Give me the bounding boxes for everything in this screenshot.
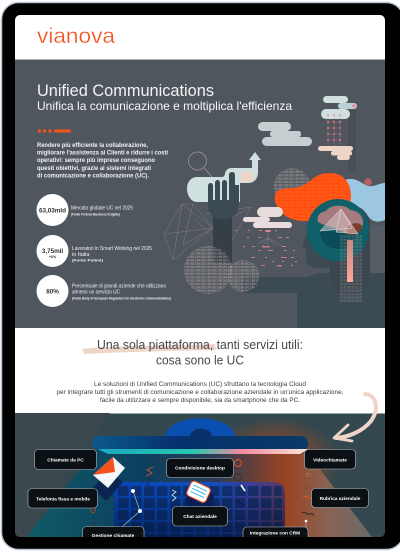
keyboard	[114, 482, 285, 537]
logo: vianova: vianova	[37, 25, 115, 48]
intro paragraph: migliorare l'assistenza ai Clienti e ridurre i costi	[37, 150, 168, 156]
intro paragraph	[37, 143, 168, 180]
stat: 3,75mil: in Italia	[72, 252, 90, 258]
stat: 80%: almeno un servizio UC	[72, 290, 120, 296]
subtitle: Unifica la comunicazione e moltiplica l'efficienza	[37, 99, 292, 113]
illustration: network lines	[164, 204, 251, 260]
stat: 3,75mil: (Fonte Polimi)	[72, 258, 103, 262]
stat: 63,03mld: 63,03mld	[39, 208, 66, 214]
stat: 80%: (Fonte Body of European Regulators for Electronic Communications)	[72, 296, 171, 300]
label: Integrazione con CRM	[243, 527, 308, 547]
title: Unified Communications	[37, 82, 214, 100]
stat: 80%: 80%	[46, 288, 59, 296]
illustration: hand with arrow	[187, 152, 261, 263]
label: Gestione chiamate: Gestione chiamate	[92, 533, 135, 539]
monitor light strip	[98, 449, 308, 454]
label: Chiamate da PC	[34, 450, 96, 470]
label: Chat aziendale: Chat aziendale	[183, 514, 217, 520]
label: Chiamate da PC: Chiamate da PC	[47, 458, 84, 464]
label: Chat aziendale	[172, 506, 228, 526]
intro paragraph: Rendere più efficiente la collaborazione,	[37, 143, 148, 149]
stat: 80%	[36, 275, 171, 307]
label: Integrazione con CRM: Integrazione con CRM	[250, 530, 300, 536]
label: Videochiamate	[304, 450, 356, 469]
label: Telefonia fissa e mobile: Telefonia fissa e mobile	[36, 496, 90, 502]
section heading: Una sola piattaforma, tanti servizi utili:	[97, 337, 303, 352]
stat: 3,75mil: 3,75mil	[42, 248, 63, 255]
section paragraph: Le soluzioni di Unified Communications (UC) sfruttano la tecnologia Cloud	[94, 381, 306, 388]
panel: intro section	[15, 328, 385, 414]
illustration: cloud with pink grid	[318, 96, 357, 160]
monitor dome	[165, 418, 235, 437]
section paragraph	[56, 381, 344, 404]
stat: 63,03mld: Mercato globale UC nel 2025	[71, 206, 133, 212]
monitor bar	[92, 436, 308, 454]
light beam	[27, 450, 372, 537]
stat: 3,75mil: Lavoratori in Smart Working nel 2025	[72, 246, 152, 252]
stat: 63,03mld	[36, 194, 133, 226]
stat: 63,03mld: (Fonte Fortune Business Insights)	[71, 212, 120, 216]
orange dots accent	[38, 129, 71, 133]
network nodes	[122, 489, 142, 526]
illustration: grey cloud	[258, 122, 312, 146]
section paragraph: per integrare tutti gli strumenti di comunicazione e collaborazione aziendale in un'unica applicazione,	[56, 389, 344, 396]
illustration: binary circles and orange blob	[274, 168, 385, 222]
label: Telefonia fissa e mobile	[28, 488, 98, 508]
panel: hero	[15, 59, 385, 328]
intro paragraph: questi obiettivi, grazie ai sistemi integrati	[37, 166, 151, 172]
section heading	[98, 340, 302, 364]
squiggles and decorations	[90, 460, 318, 534]
intro paragraph: operativi: sempre più imprese conseguono	[37, 158, 155, 164]
panel: services	[15, 394, 385, 552]
envelope	[93, 457, 125, 501]
illustration: head silhouette	[297, 199, 385, 328]
stat: 3,75mil	[36, 235, 152, 267]
stat: 3,75mil: +6%	[49, 255, 57, 259]
label: Gestione chiamate	[82, 526, 144, 537]
intro paragraph: di comunicazione e collaborazione (UC).	[37, 174, 149, 180]
brush stroke	[82, 344, 216, 354]
label: Rubrica aziendale: Rubrica aziendale	[320, 496, 361, 502]
stat: 80%: Percentuale di grandi aziende che utilizzano	[72, 284, 166, 290]
illustration: dark bar and binary pair	[184, 246, 313, 294]
arrow	[334, 394, 376, 441]
header band	[15, 15, 385, 60]
chat bubble icon	[186, 480, 211, 503]
label: Videochiamate: Videochiamate	[313, 458, 347, 464]
section paragraph: facile da utilizzare e sempre disponibile, sia da smartphone che da PC.	[100, 397, 300, 404]
section heading: cosa sono le UC	[156, 352, 244, 368]
illustration: small cloud with roots	[235, 207, 297, 266]
label: Condivisione desktop	[166, 458, 234, 478]
label: Rubrica aziendale	[312, 488, 368, 508]
label: Condivisione desktop: Condivisione desktop	[175, 466, 225, 472]
